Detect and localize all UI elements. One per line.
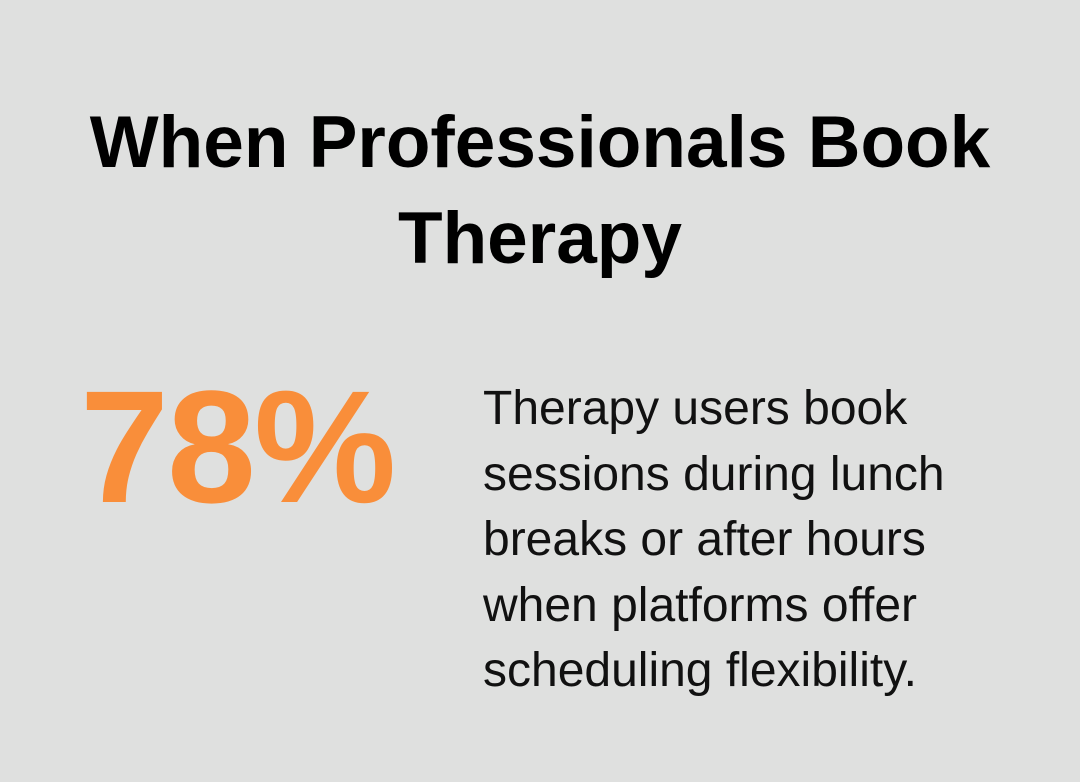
stat number: 78% [80, 357, 394, 536]
title: Therapy [398, 198, 682, 279]
description text: breaks or after hours [483, 513, 926, 566]
description text: scheduling flexibility. [483, 644, 917, 697]
description text: when platforms offer [483, 578, 917, 632]
description text: Therapy users book [483, 382, 907, 435]
title: When Professionals Book [90, 102, 990, 183]
description text: sessions during lunch [483, 448, 945, 500]
description text [483, 382, 945, 697]
title [90, 102, 990, 279]
